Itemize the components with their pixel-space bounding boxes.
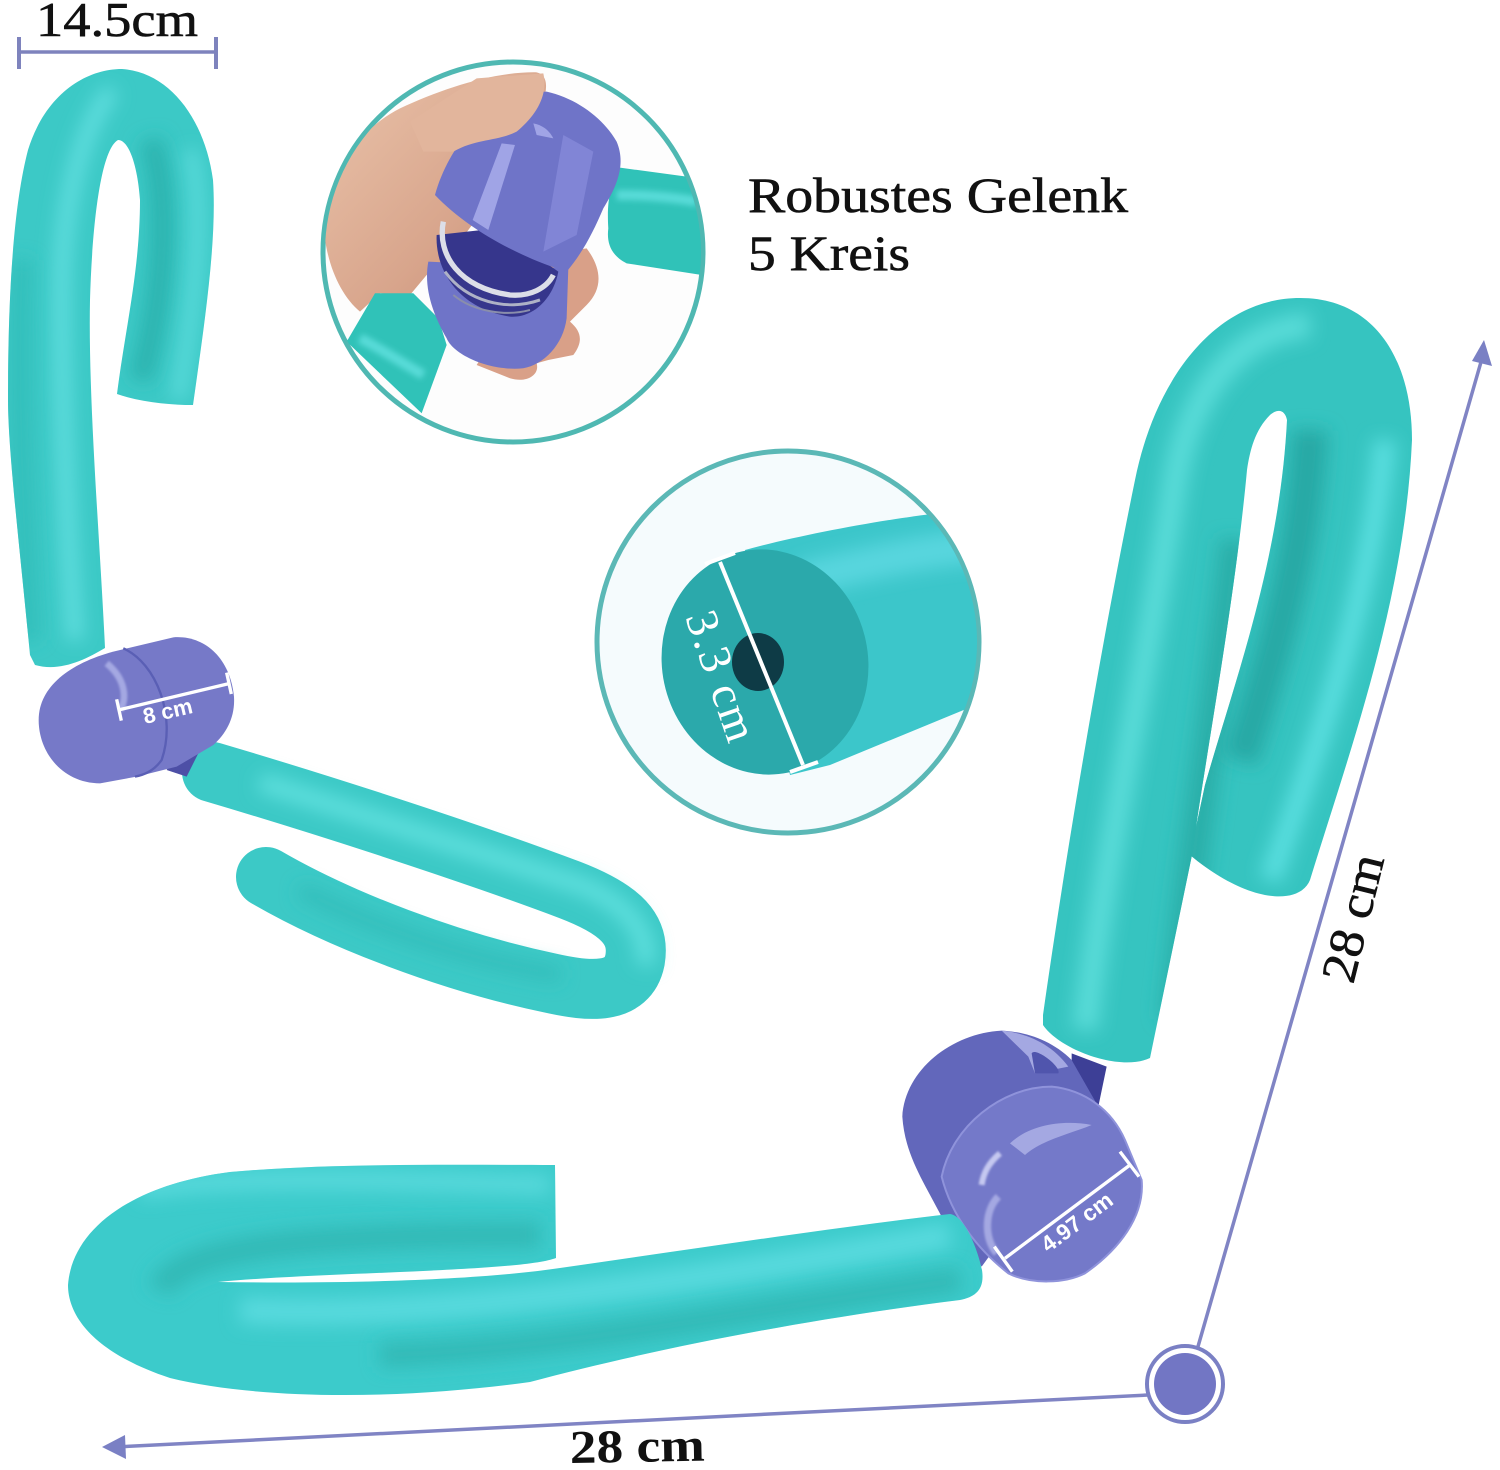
foam end face [662,550,868,775]
dimension arrow: vertical 28 cm [1197,340,1492,1350]
thumb over cap [447,73,544,152]
small purple joint with 8 cm measure [39,637,234,783]
measure line 3.3 cm [705,553,818,772]
upper purple cap [435,92,621,272]
thigh trainer: middle-left lower arm [212,772,646,989]
tube hole [732,633,784,691]
dimension arrow: vertical 28 cm: 28 cm [1310,848,1395,988]
dimension arrow: horizontal 28 cm [102,1395,1148,1470]
caption: robust joint: 5 Kreis [748,225,910,281]
origin marker circle [1147,1346,1223,1422]
cap highlights [473,123,593,252]
caption: robust joint: Robustes Gelenk [748,167,1128,223]
inset circle: robust joint held in hand [323,62,705,442]
small purple joint with 8 cm measure: 8 cm [140,693,195,729]
metal spring [437,222,558,317]
teal foam tube lower left [347,293,447,413]
caption: robust joint [748,167,1128,281]
lower purple cup [427,262,568,369]
big purple joint with 4.97 cm measure: 4.97 cm [1036,1187,1118,1257]
inset circle: foam tube cross-section: 3.3 cm [676,604,768,748]
icon: hand [323,72,599,380]
thigh trainer: top-left upper arm [8,69,214,668]
inset circle: foam tube cross-section [597,451,1000,833]
teal foam tube right [608,168,705,275]
foam tube side [745,514,977,775]
thigh trainer: big right upper arm [1030,290,1420,1080]
big purple joint with 4.97 cm measure [902,1031,1142,1281]
thigh trainer: bottom arm [60,1160,990,1405]
